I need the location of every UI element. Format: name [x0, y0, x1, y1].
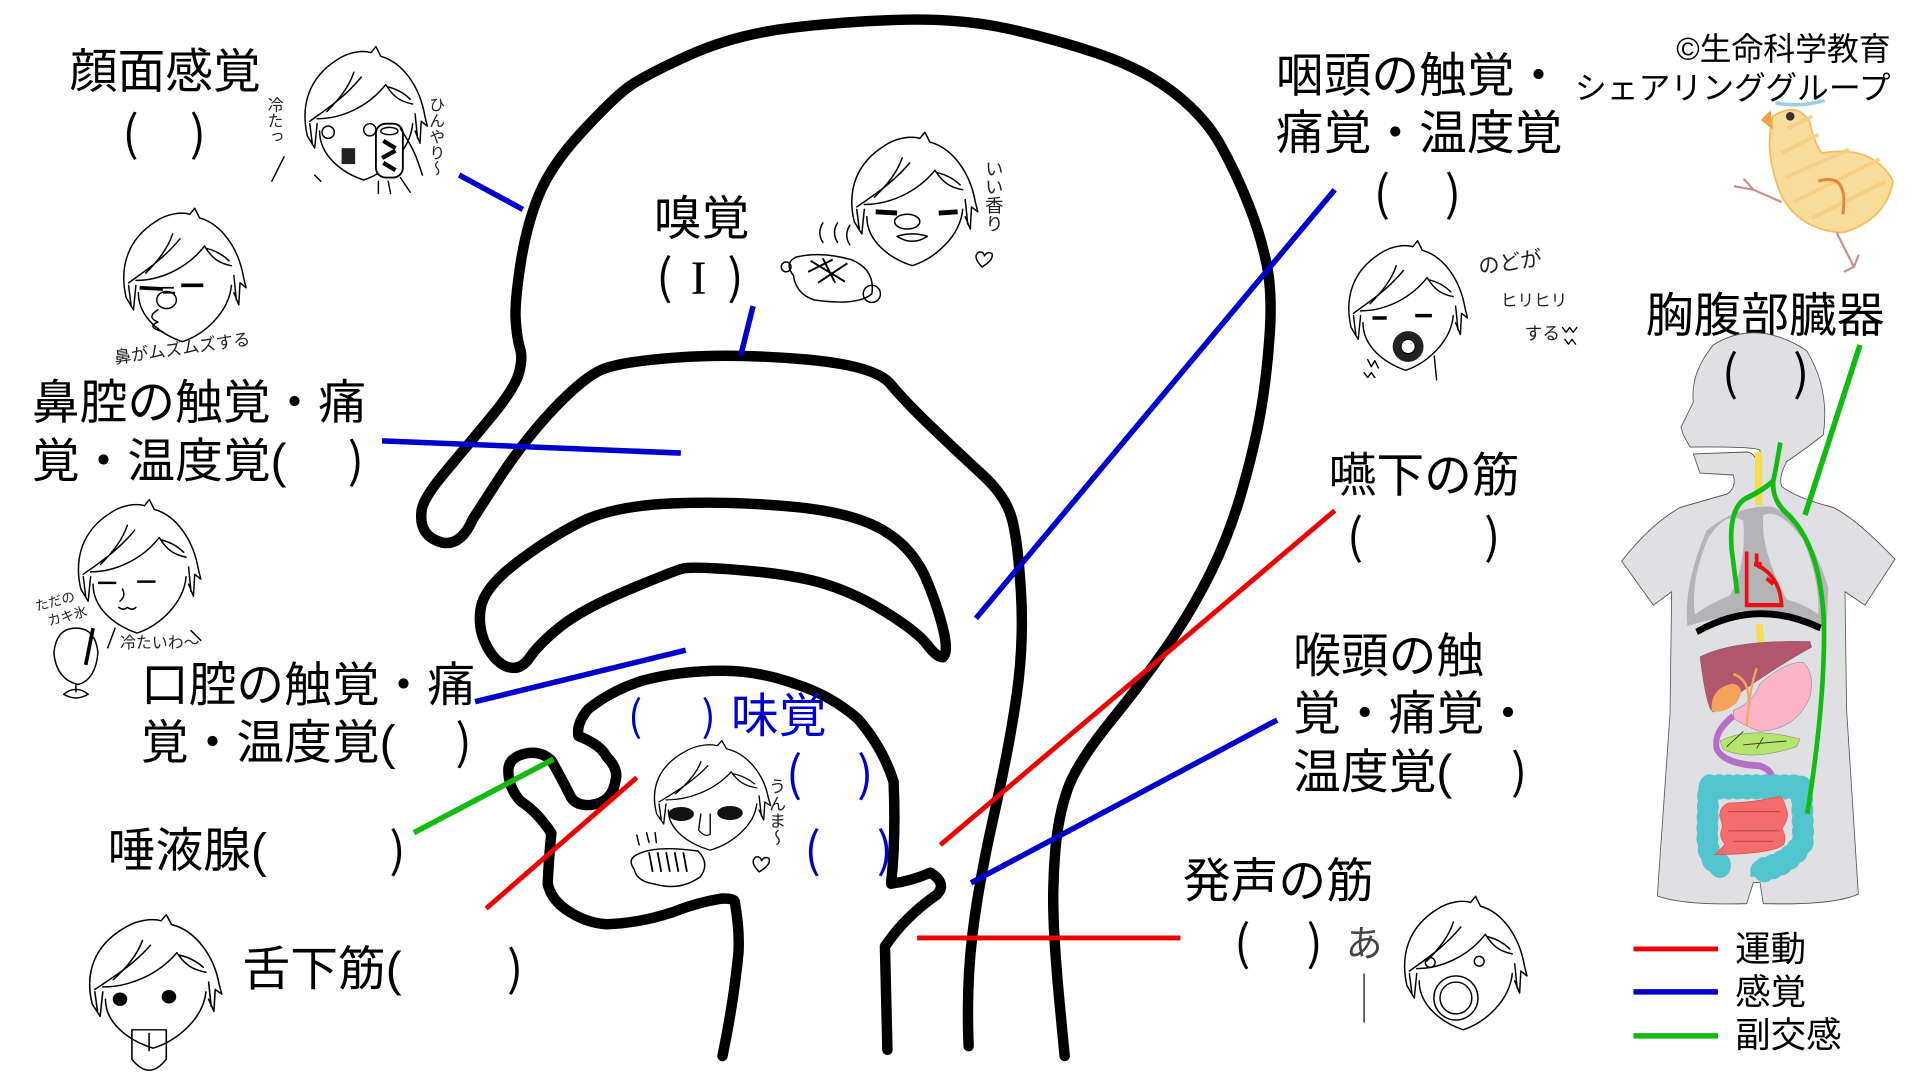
label: swallowing muscles: (: [1347, 498, 1363, 567]
label: larynx: 喉頭の触: [1293, 630, 1484, 683]
bile ducts: [1733, 668, 1757, 726]
handwriting: tasty: うんま〜: [765, 778, 790, 846]
label: facial sensation: ): [190, 96, 206, 165]
label: nasal cavity: ): [348, 423, 364, 492]
head outline: skull, nose and nasal cavity: [421, 20, 1271, 1056]
label: nasal cavity: 覚・温度覚(: [32, 436, 287, 489]
body silhouette: [1622, 333, 1895, 904]
face: shaved ice: カキ氷: [45, 600, 90, 630]
leader line: hypoglossal muscle: [486, 778, 637, 909]
label: larynx: 温度覚(: [1293, 747, 1452, 800]
label: phonation muscles: 発声の筋: [1183, 856, 1374, 909]
label: taste, blue: (: [628, 683, 642, 743]
label: pharynx: [1276, 50, 1562, 225]
thoracoabdominal organs parentheses: (: [1722, 334, 1738, 404]
label: facial sensation: [70, 46, 261, 165]
label: taste, blue: (: [804, 812, 821, 881]
stomach: [1733, 662, 1811, 731]
label: salivary gland: ): [389, 812, 406, 881]
thoracoabdominal organs parentheses: [1722, 334, 1809, 404]
icon: bitten meat: [631, 833, 705, 887]
green vagus nerves: [1731, 442, 1824, 814]
small intestine: [1715, 796, 1788, 855]
leader line: facial sensation: [459, 175, 523, 209]
leader line: nasal cavity: [382, 441, 681, 453]
label: copyright: [1575, 31, 1891, 106]
label: oral cavity: 覚・温度覚(: [141, 717, 396, 770]
label: swallowing muscles: 嚥下の筋: [1329, 450, 1520, 503]
label: oral cavity: 口腔の触覚・痛: [141, 660, 475, 713]
colon: [1707, 787, 1803, 877]
face: cold on the cheek: [264, 47, 449, 193]
leader line: olfaction: [741, 306, 753, 355]
label: oral cavity: [141, 660, 475, 773]
face: sore throat: [1349, 241, 1577, 380]
legend: 副交感: [1735, 1015, 1842, 1055]
face: saying ah: [1346, 896, 1527, 1030]
legend: [1633, 929, 1842, 1055]
label: olfaction: (: [656, 239, 672, 308]
label: taste, blue: ): [857, 736, 873, 805]
label: olfaction: ): [727, 239, 743, 308]
face: cold on the cheek: 冷たっ: [264, 97, 287, 144]
face: itchy nose: 鼻がムズムズする: [112, 325, 251, 369]
tongue and throat outline: [508, 671, 941, 1056]
label: nasal cavity: [32, 377, 366, 492]
label: swallowing muscles: [1329, 450, 1520, 567]
label: thoracoabdominal organs: 胸腹部臓器: [1646, 290, 1884, 343]
label: hypoglossal muscle: [242, 931, 523, 1000]
label: pharynx: (: [1374, 156, 1390, 225]
leader line: pharynx: [976, 190, 1335, 618]
face: itchy nose: [112, 208, 251, 369]
face: cold on the cheek: ひんやり〜: [426, 97, 449, 176]
label: pharynx: 痛覚・温度覚: [1276, 107, 1562, 160]
pancreas: [1720, 733, 1800, 755]
handwriting: nice smell: [976, 159, 1007, 267]
face: sore throat: ヒリヒリ: [1501, 287, 1567, 311]
face: tasty: [654, 741, 771, 850]
label: taste, blue: ): [877, 812, 893, 881]
label: oral cavity: ): [456, 704, 472, 773]
label: phonation muscles: [1183, 856, 1374, 974]
label: copyright: ©生命科学教育: [1676, 31, 1891, 67]
face: sore throat: する: [1525, 319, 1560, 345]
label: taste, blue: 味覚: [731, 690, 827, 743]
face: sore throat: のどが: [1476, 241, 1544, 281]
face: tongue out: [90, 915, 222, 1070]
label: nasal cavity: 鼻腔の触覚・痛: [32, 377, 366, 430]
label: olfaction: 嗅覚: [654, 193, 749, 246]
legend: 運動: [1735, 929, 1806, 969]
palate outline: [480, 503, 946, 668]
label: taste, blue: (: [786, 736, 802, 805]
label: larynx: ): [1511, 734, 1527, 803]
diaphragm: [1697, 614, 1821, 632]
handwriting: nice smell: いい香り: [981, 159, 1007, 233]
label: hypoglossal muscle: ): [507, 931, 523, 1000]
liver: [1700, 641, 1812, 712]
label: phonation muscles: ): [1307, 905, 1323, 974]
label: facial sensation: 顔面感覚: [70, 46, 261, 99]
esophagus: [1759, 452, 1768, 666]
label: larynx: [1293, 630, 1532, 803]
label: salivary gland: 唾液腺(: [108, 825, 267, 878]
label: copyright: シェアリンググループ: [1575, 70, 1891, 106]
leader line: phonation muscles: [917, 936, 1180, 940]
leader line: swallowing muscles: [940, 511, 1335, 845]
label: hypoglossal muscle: 舌下筋(: [242, 944, 402, 997]
leader line: oral cavity: [475, 650, 686, 702]
face: nice smell: [852, 132, 978, 266]
label: phonation muscles: (: [1234, 905, 1250, 974]
icon: roast meat: [781, 223, 880, 302]
leader line: salivary gland: [414, 759, 553, 833]
label: pharynx: ): [1445, 156, 1461, 225]
red cardiac nerve: [1747, 552, 1782, 605]
leader line: larynx: [971, 720, 1277, 883]
legend: 感覚: [1735, 972, 1806, 1012]
face: shaved ice: [33, 500, 201, 698]
torso diagram with organs: [1622, 333, 1895, 904]
face: shaved ice: 冷たいわ〜: [120, 630, 200, 653]
icon: chick: [1734, 100, 1893, 272]
label: olfaction: [654, 193, 749, 308]
lungs: [1687, 506, 1828, 626]
label: taste, blue: [628, 683, 893, 881]
leader line: thoracoabdominal organs: [1805, 345, 1860, 515]
label: olfaction: I: [691, 252, 707, 305]
label: larynx: 覚・痛覚・: [1293, 688, 1532, 741]
label: facial sensation: (: [122, 96, 139, 165]
label: swallowing muscles: ): [1484, 498, 1500, 567]
label: salivary gland: [108, 812, 406, 881]
label: pharynx: 咽頭の触覚・: [1276, 50, 1562, 103]
face: saying ah: あ: [1346, 913, 1382, 967]
gallbladder: [1712, 684, 1741, 712]
handwriting: tasty: [753, 778, 790, 872]
label: taste, blue: ): [702, 683, 716, 743]
thoracoabdominal organs parentheses: ): [1793, 334, 1809, 404]
duodenum: [1716, 716, 1772, 775]
face: shaved ice: ただの: [33, 585, 77, 615]
